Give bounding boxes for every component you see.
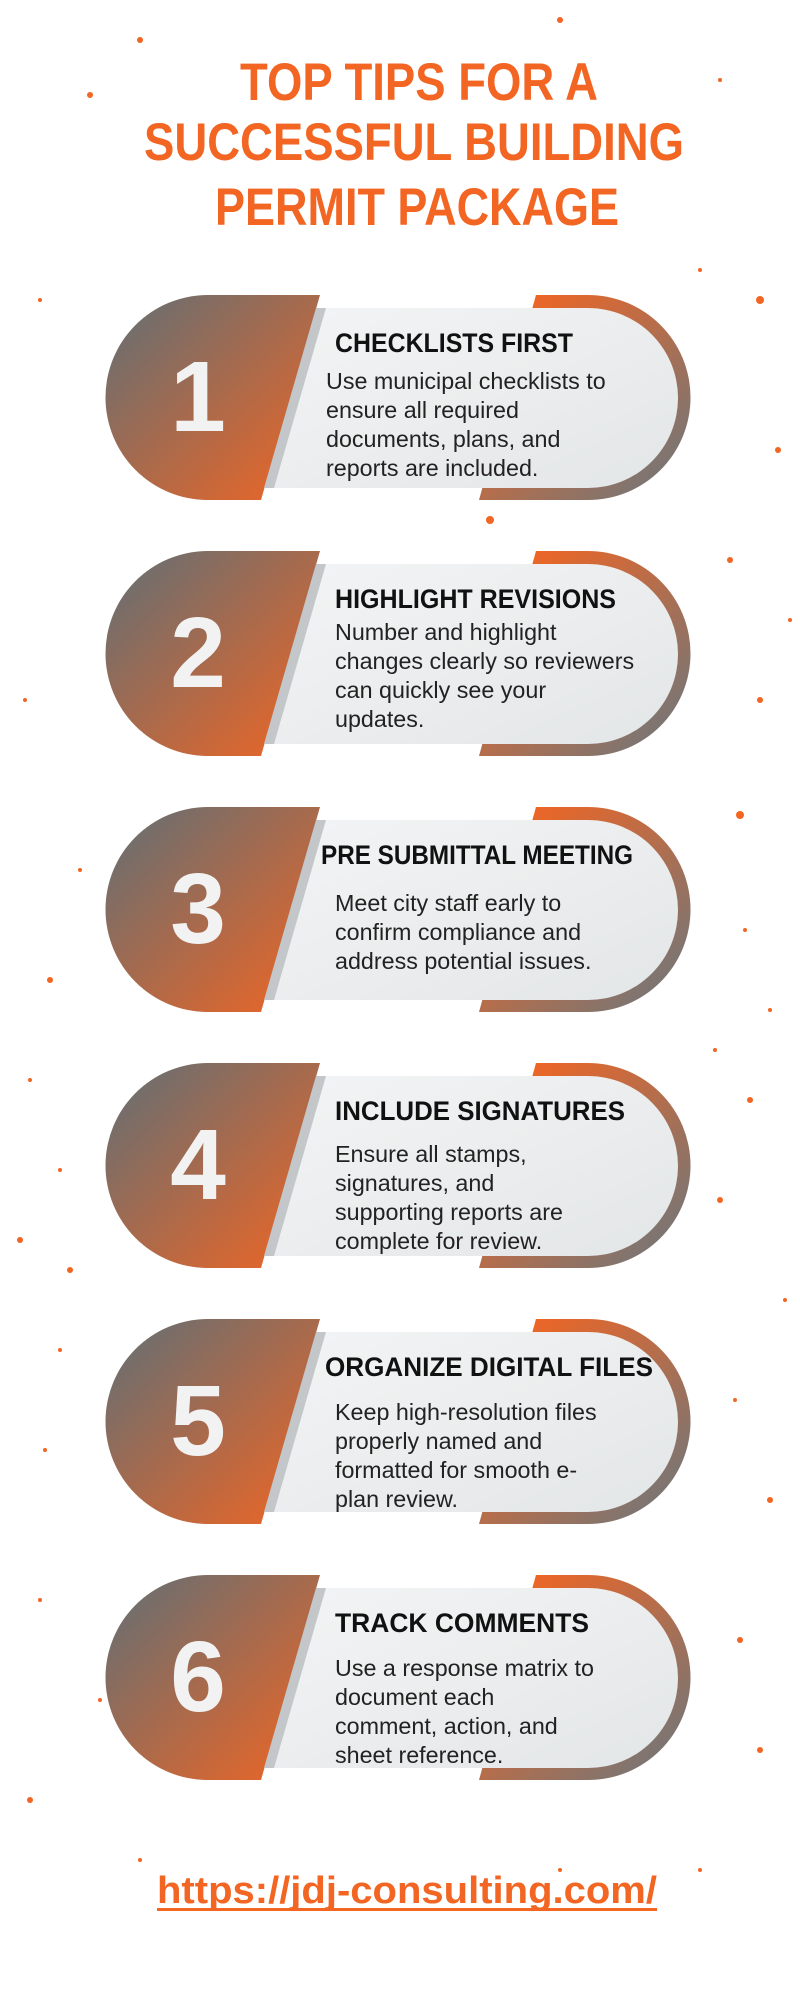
card 4: complete for review.	[335, 1228, 542, 1254]
card 1: 1	[170, 341, 226, 453]
title	[144, 53, 684, 237]
title: TOP TIPS FOR A	[240, 53, 598, 112]
card 2	[106, 551, 690, 756]
card 5: properly named and	[335, 1428, 542, 1454]
card 2: changes clearly so reviewers	[335, 648, 634, 674]
card 2: can quickly see your	[335, 677, 546, 703]
card 6: Use a response matrix to	[335, 1655, 594, 1681]
card 4: Ensure all stamps,	[335, 1141, 527, 1167]
card 1: documents, plans, and	[326, 426, 560, 452]
card 3: PRE SUBMITTAL MEETING	[321, 840, 633, 870]
footer url: https://jdj-consulting.com/	[157, 1870, 657, 1912]
card 6	[106, 1575, 690, 1780]
card 6: comment, action, and	[335, 1713, 558, 1739]
card 1	[106, 295, 690, 500]
card 6: 6	[170, 1621, 226, 1733]
title: PERMIT PACKAGE	[215, 178, 619, 237]
card 1: CHECKLISTS FIRST	[335, 328, 573, 358]
card 6: sheet reference.	[335, 1742, 503, 1768]
card 3: confirm compliance and	[335, 919, 581, 945]
card 5: 5	[170, 1365, 226, 1477]
card 6: document each	[335, 1684, 494, 1710]
card 3: Meet city staff early to	[335, 890, 561, 916]
card 5: formatted for smooth e-	[335, 1457, 577, 1483]
card 2: HIGHLIGHT REVISIONS	[335, 584, 616, 614]
card 3	[106, 807, 690, 1012]
card 2: 2	[170, 597, 226, 709]
card 1: ensure all required	[326, 397, 519, 423]
card 1: Use municipal checklists to	[326, 368, 606, 394]
card 2: updates.	[335, 706, 424, 732]
card 5: Keep high-resolution files	[335, 1399, 597, 1425]
card 3: 3	[170, 853, 226, 965]
card 4: signatures, and	[335, 1170, 494, 1196]
card 4: supporting reports are	[335, 1199, 563, 1225]
card 3: address potential issues.	[335, 948, 591, 974]
card 6: TRACK COMMENTS	[335, 1608, 589, 1638]
card 4: 4	[170, 1109, 226, 1221]
card 4: INCLUDE SIGNATURES	[335, 1096, 625, 1126]
title: SUCCESSFUL BUILDING	[144, 113, 684, 172]
card 5	[106, 1319, 690, 1524]
card 4	[106, 1063, 690, 1268]
card 1: reports are included.	[326, 455, 538, 481]
card 5: ORGANIZE DIGITAL FILES	[325, 1352, 653, 1382]
card 2: Number and highlight	[335, 619, 557, 645]
card 5: plan review.	[335, 1486, 458, 1512]
